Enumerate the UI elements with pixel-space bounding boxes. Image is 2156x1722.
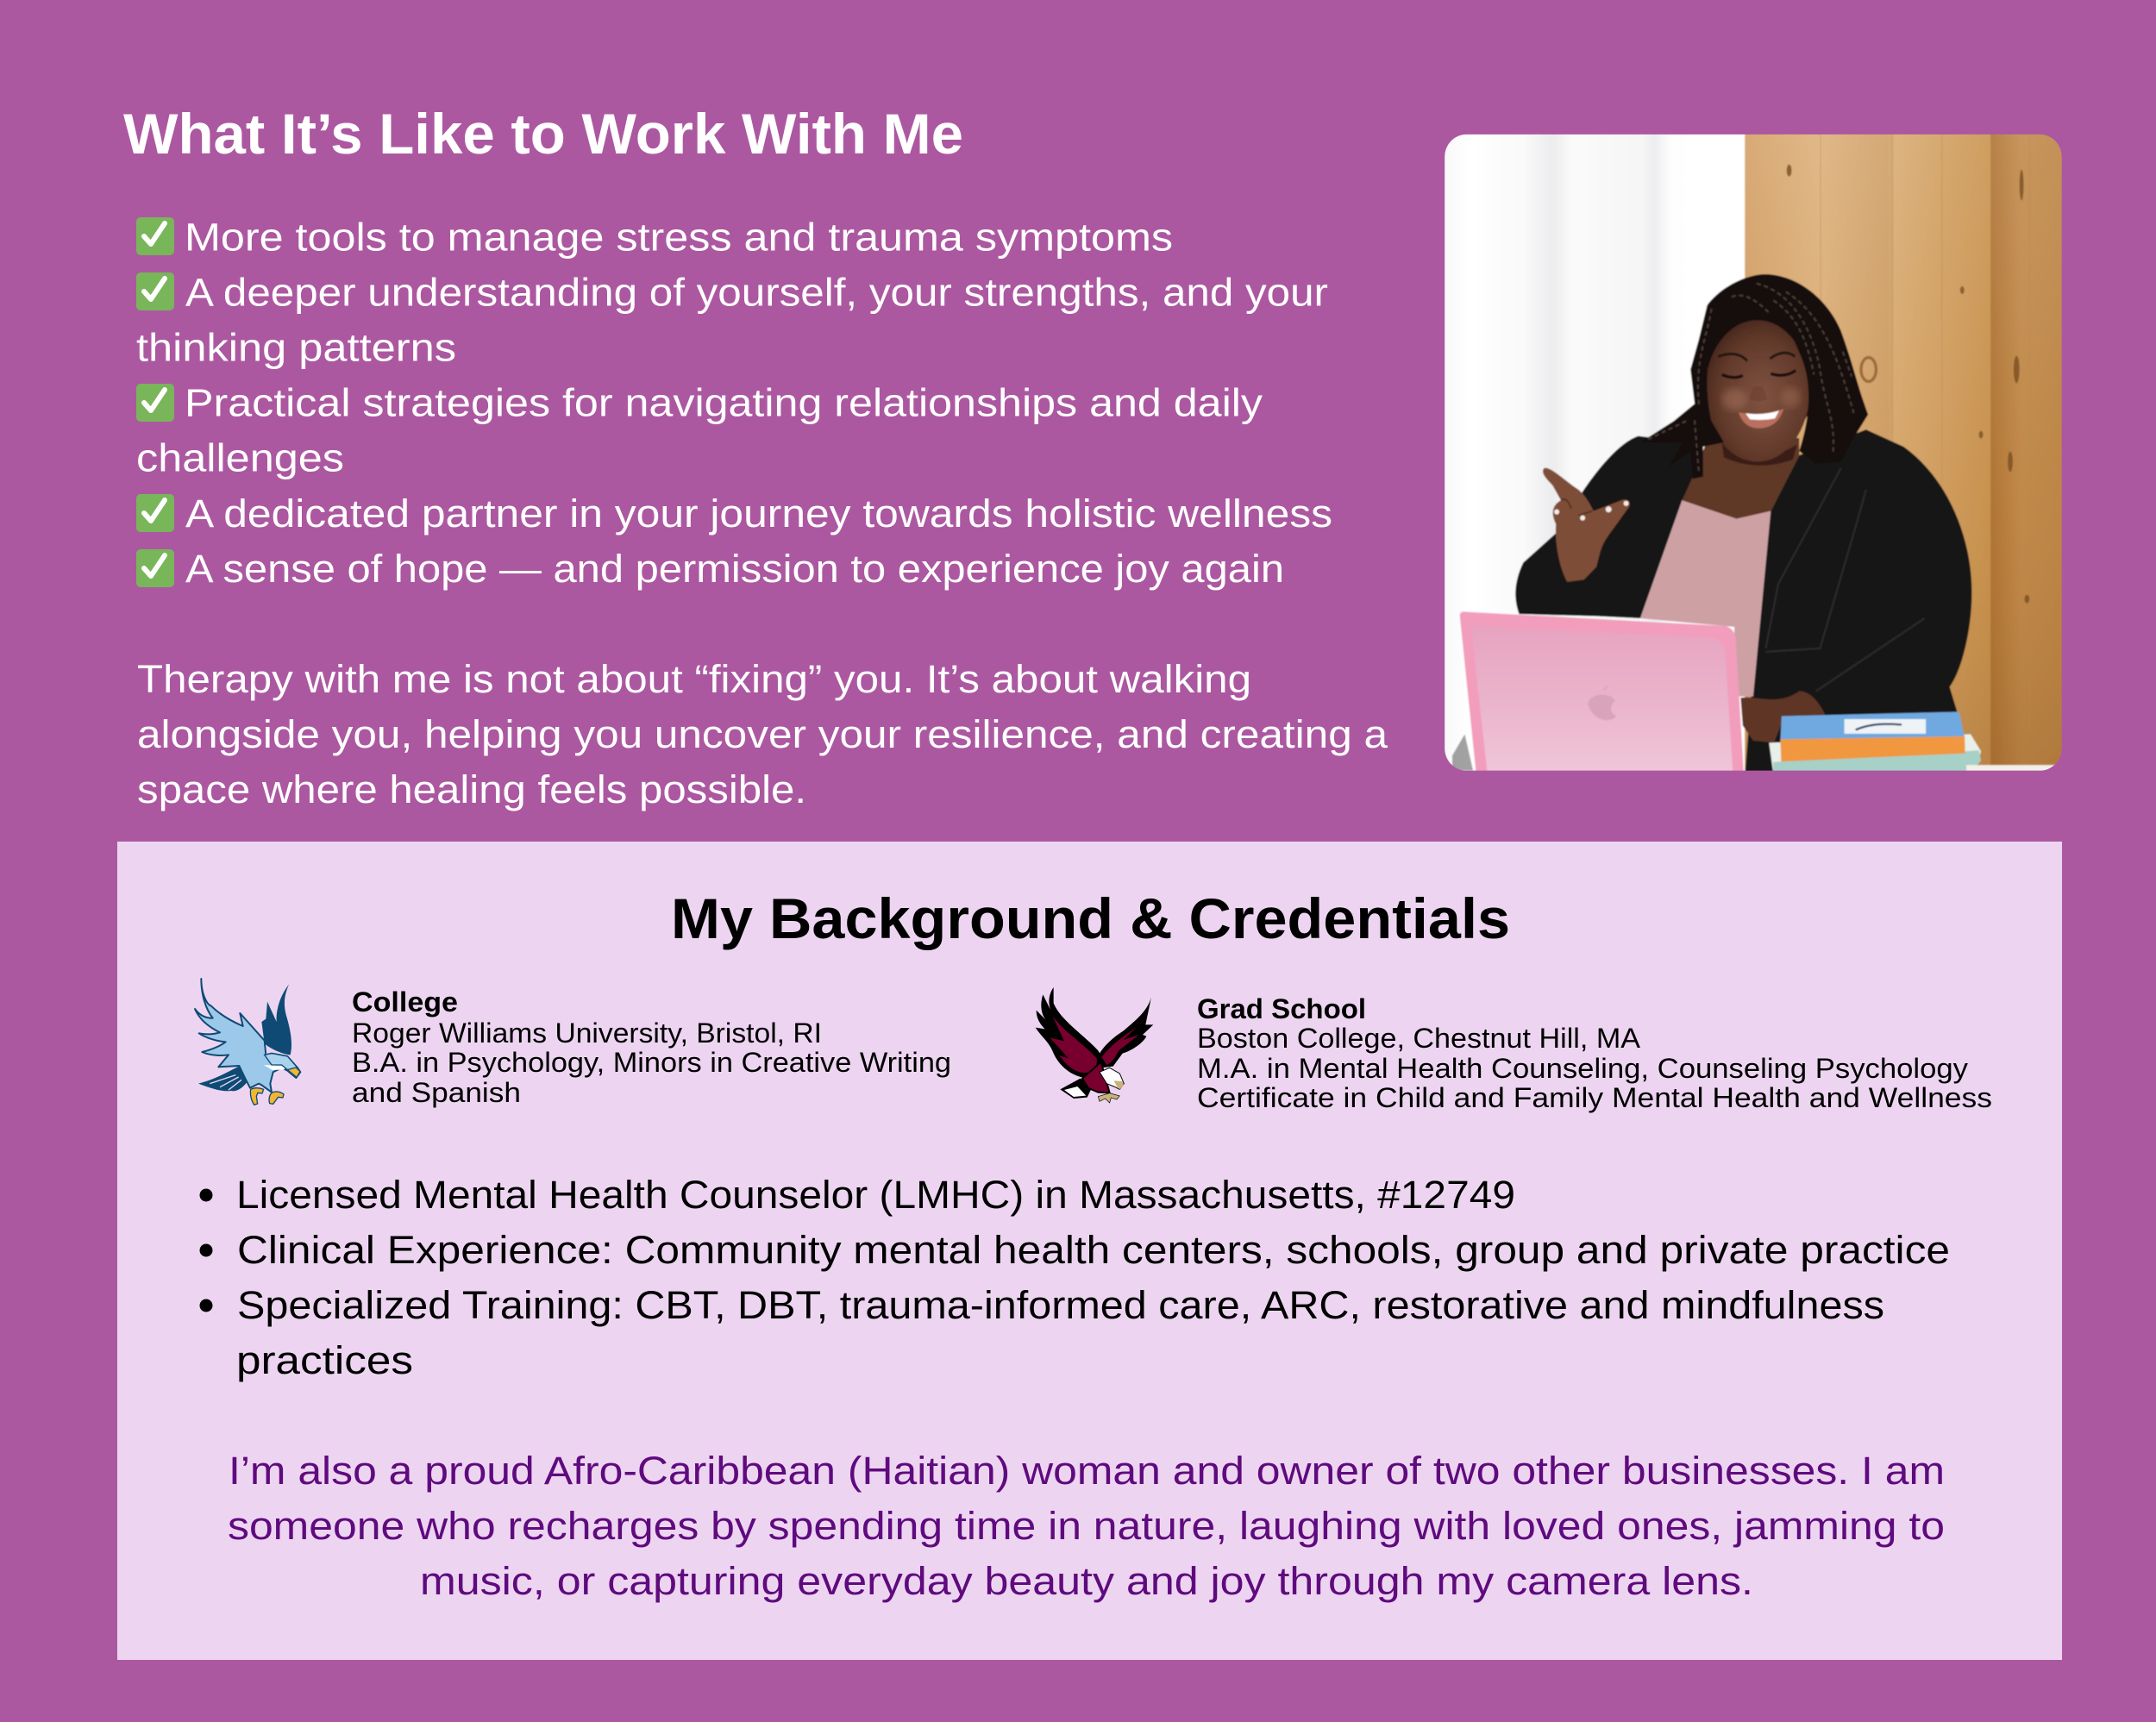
text: college xyxy=(352,986,951,1108)
list: licenses and training: Licensed Mental Health Counselor (LMHC) in Massachusetts, #12749 xyxy=(236,1173,1515,1217)
text: grad school: M.A. in Mental Health Counseling, Counseling Psychology xyxy=(1197,1053,1968,1084)
checklist of benefits: thinking patterns xyxy=(136,326,456,369)
text: grad school: Boston College, Chestnut Hill, MA xyxy=(1197,1023,1641,1054)
jacket xyxy=(1515,436,1695,618)
list: licenses and training: Clinical Experience: Community mental health centers, schools, group and private practice xyxy=(237,1228,1950,1272)
checklist of benefits: A dedicated partner in your journey towards holistic wellness xyxy=(185,492,1332,535)
photo: therapist at laptop xyxy=(1439,129,2066,777)
books xyxy=(1769,734,1981,773)
paragraph: personal note: someone who recharges by spending time in nature, laughing with loved ones, jamming to xyxy=(228,1504,1945,1548)
checklist of benefits: A sense of hope — and permission to experience joy again xyxy=(185,547,1284,591)
list: licenses and training: Specialized Training: CBT, DBT, trauma-informed care, ARC, restorative and mindfulness xyxy=(237,1283,1884,1327)
icon: check 4 xyxy=(136,494,174,532)
panel: background and credentials xyxy=(117,842,2062,1660)
icon: check 1 xyxy=(136,217,174,255)
laptop xyxy=(1460,611,1744,777)
icon: check 3 xyxy=(136,384,174,422)
paragraph: therapy approach xyxy=(137,657,1388,811)
text: grad school: Certificate in Child and Family Mental Health and Wellness xyxy=(1197,1082,1992,1113)
chest and neck xyxy=(1683,429,1799,519)
checklist of benefits: Practical strategies for navigating relationships and daily xyxy=(185,381,1263,424)
text: college: and Spanish xyxy=(352,1077,521,1108)
text: college: B.A. in Psychology, Minors in Creative Writing xyxy=(352,1047,951,1078)
icon: check 5 xyxy=(136,549,174,587)
heading: My Background & Credentials: My Background & Credentials xyxy=(671,886,1510,950)
hand and forearm xyxy=(1543,468,1630,582)
text: college: College xyxy=(352,986,458,1018)
top xyxy=(1640,500,1771,697)
text: grad school: Grad School xyxy=(1197,993,1366,1024)
checklist of benefits: More tools to manage stress and trauma symptoms xyxy=(185,216,1173,259)
list: licenses and training: practices xyxy=(236,1338,413,1382)
paragraph: personal note: I’m also a proud Afro-Caribbean (Haitian) woman and owner of two other businesses. I am xyxy=(229,1449,1945,1493)
paragraph: therapy approach: alongside you, helping you uncover your resilience, and creating a xyxy=(137,712,1388,756)
icon: check 2 xyxy=(136,272,174,310)
paragraph: therapy approach: space where healing feels possible. xyxy=(137,767,806,811)
paragraph: therapy approach: Therapy with me is not about “fixing” you. It’s about walking xyxy=(137,657,1251,701)
text: college: Roger Williams University, Bristol, RI xyxy=(352,1018,822,1049)
text: grad school xyxy=(1197,993,1992,1113)
face xyxy=(1705,320,1809,461)
heading: What It's Like to Work With Me: What It’s Like to Work With Me xyxy=(123,102,963,166)
hair behind the face xyxy=(1706,316,1809,419)
icon: blue hawk logo xyxy=(195,979,300,1105)
paragraph: personal note xyxy=(228,1449,1945,1603)
checklist of benefits: challenges xyxy=(136,436,344,479)
checklist of benefits xyxy=(136,216,1332,591)
checklist of benefits: A deeper understanding of yourself, your strengths, and your xyxy=(185,271,1328,314)
hair xyxy=(1640,274,1868,479)
list: licenses and training xyxy=(200,1173,1950,1382)
icon: maroon eagle logo xyxy=(1036,987,1153,1103)
paragraph: personal note: music, or capturing everyday beauty and joy through my camera lens. xyxy=(420,1559,1753,1603)
